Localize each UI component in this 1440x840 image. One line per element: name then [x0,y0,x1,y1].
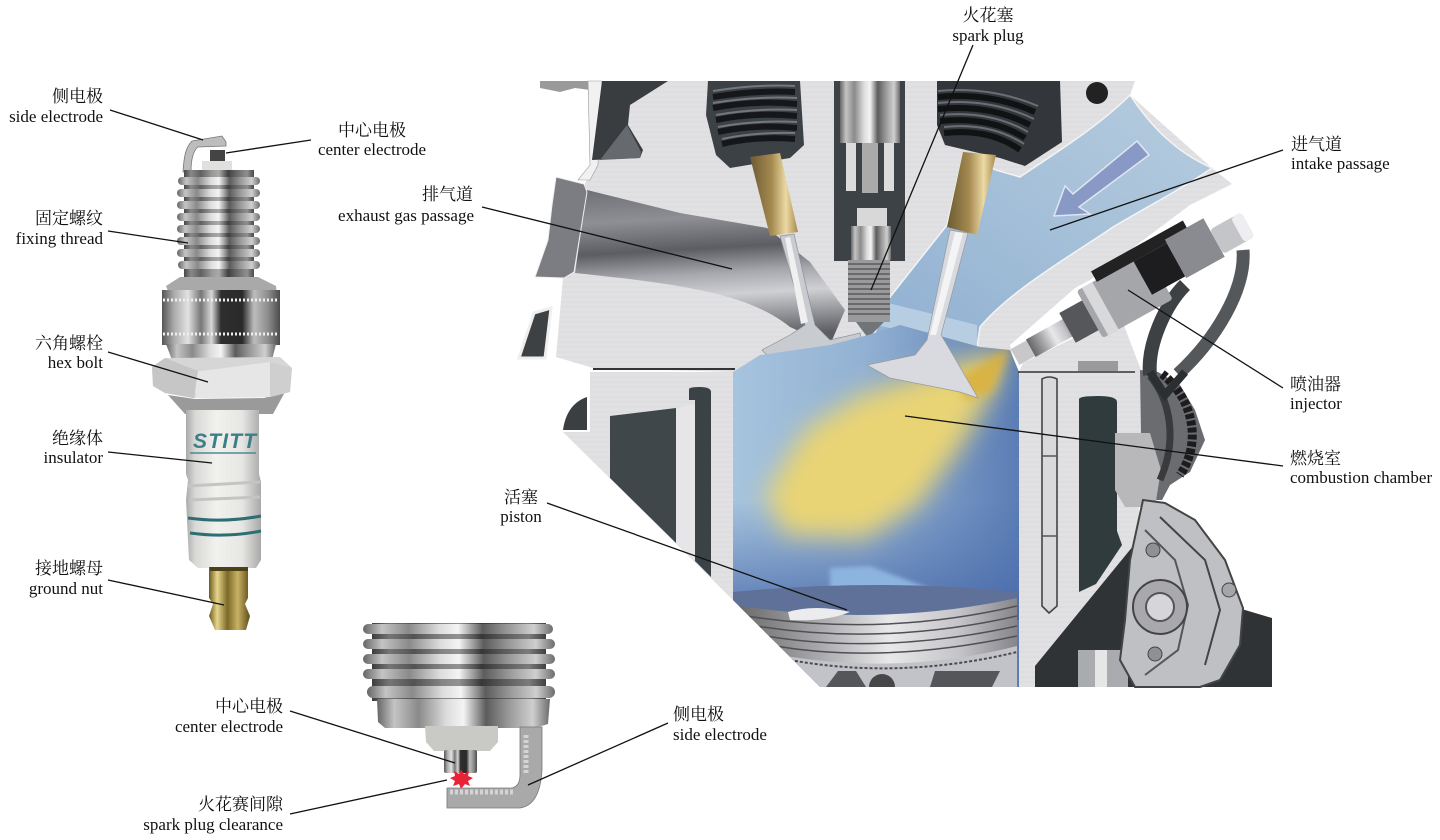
label: center electrode (detail) [175,697,283,736]
spark plug: full view [152,136,292,630]
side electrode [183,136,226,172]
label: exhaust gas passage [338,185,474,225]
label: spark plug clearance [143,795,284,834]
side electrode detail [447,727,542,808]
injector [997,194,1262,395]
label: ground nut [29,559,103,598]
left valve [762,234,863,358]
fixing thread [177,170,260,278]
label: side electrode (detail) [673,705,767,744]
hex bolt [152,357,292,414]
label: insulator: 绝缘体 [52,429,103,448]
label: side electrode: 侧电极 [52,87,103,106]
detail view: spark plug tip [363,623,555,808]
label: center electrode: center electrode [318,140,426,159]
dark cavity top-left [592,81,668,160]
label: spark plug: 火花塞 [962,6,1014,25]
dome [563,397,587,430]
label: injector: 喷油器 [1290,375,1341,394]
pushrod [1042,377,1057,613]
right valve spring [937,81,1062,166]
thread detail [363,623,555,701]
left wall strip [578,81,602,180]
label: combustion chamber: combustion chamber [1290,468,1432,487]
intake valve [867,230,978,398]
insulator [186,410,261,568]
label: exhaust gas passage: 排气道 [422,185,473,204]
left valve guide [750,153,798,236]
flow arrow [1054,141,1149,216]
label: center electrode [318,121,426,159]
label: center electrode (detail): 中心电极 [215,697,283,716]
brand: STITT [193,430,258,453]
label: spark plug clearance: 火花赛间隙 [198,795,284,814]
small lower-left dark slot [519,308,551,358]
label: spark plug [952,6,1024,45]
leader lines [108,45,1283,814]
ground nut [209,567,250,630]
label: insulator: insulator [44,448,103,467]
ceramic insulator tip [425,726,498,751]
collar [162,277,280,360]
center electrode [210,150,225,162]
spark [450,770,473,789]
engine cross-section [519,81,1272,700]
combustion chamber [733,325,1019,700]
timing chain [1115,370,1205,507]
label: fixing thread: fixing thread [16,229,103,248]
label: center electrode: 中心电极 [338,121,406,140]
right valve guide [947,152,996,235]
right engine block [1018,315,1141,687]
label: insulator [44,429,103,467]
head bolt [1086,82,1108,104]
label: combustion chamber [1290,449,1432,487]
label: combustion chamber: 燃烧室 [1290,449,1341,468]
label: piston: 活塞 [504,488,538,507]
label: intake passage: 进气道 [1291,135,1342,154]
cam pulley [1120,500,1243,687]
label: side electrode: side electrode [9,107,103,126]
label: side electrode [9,87,103,126]
label: exhaust gas passage: exhaust gas passage [338,206,474,225]
label: ground nut: 接地螺母 [35,559,103,578]
piston reflection [828,564,927,586]
center electrode detail [444,750,477,773]
label: piston: piston [500,507,542,526]
label: side electrode (detail): side electrode [673,725,767,744]
exhaust gas passage [535,177,845,345]
coolant slot [1079,396,1122,592]
label: spark plug: spark plug [952,26,1024,45]
water jacket [610,408,676,543]
label: hex bolt [35,334,103,372]
label: spark plug clearance: spark plug clearance [143,815,283,834]
fuel spray plume [765,350,1005,538]
top-left fragment [540,81,592,92]
left valve spring [706,81,804,168]
label: ground nut: ground nut [29,579,103,598]
label: intake passage [1291,135,1390,173]
cylinder head casting [556,81,1232,372]
intake passage [870,95,1212,347]
shell base [377,699,550,728]
lower right dark mechanism [1035,540,1272,687]
injector body [997,194,1262,380]
label: hex bolt: 六角螺栓 [35,334,103,353]
label: intake passage: intake passage [1291,154,1390,173]
label: hex bolt: hex bolt [48,353,103,372]
spark plug in head [834,81,905,338]
label: piston [500,488,542,526]
label: fixing thread: 固定螺纹 [35,209,103,228]
piston [733,585,1018,687]
left engine block [563,369,735,600]
fuel hoses [1178,250,1243,374]
label: injector [1290,375,1342,413]
label: center electrode (detail): center electrode [175,717,283,736]
label: injector: injector [1290,394,1342,413]
label: fixing thread [16,209,103,248]
label: side electrode (detail): 侧电极 [673,705,724,724]
